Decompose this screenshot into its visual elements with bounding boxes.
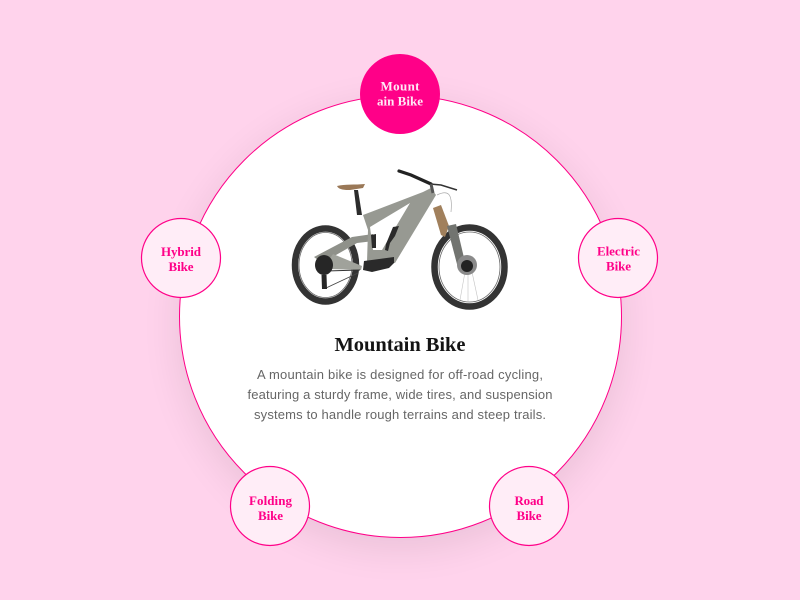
node: Road Bike: Bike bbox=[516, 508, 542, 523]
node: Folding Bike: Folding bbox=[249, 493, 292, 508]
motor bbox=[363, 257, 394, 272]
frame bbox=[363, 188, 436, 263]
node: Road Bike: Road bbox=[514, 493, 544, 508]
node: Electric Bike: Electric bbox=[597, 244, 640, 258]
node: Hybrid Bike: Bike bbox=[168, 259, 194, 274]
bike illustration bbox=[295, 171, 504, 306]
rear wheel bbox=[295, 228, 356, 302]
node: Hybrid Bike bbox=[142, 218, 220, 298]
node: Mountain Bike (active): ain Bike bbox=[377, 94, 423, 108]
rear swingarm and chain bbox=[314, 234, 374, 289]
node: Mountain Bike (active) bbox=[360, 54, 440, 134]
central circle panel bbox=[178, 94, 622, 538]
handlebar bbox=[399, 171, 457, 193]
node: Folding Bike: Bike bbox=[258, 508, 283, 523]
description text bbox=[248, 367, 552, 422]
heading: Mountain Bike bbox=[334, 334, 466, 356]
node: Folding Bike bbox=[230, 466, 310, 546]
seat and seatpost bbox=[337, 184, 365, 215]
node: Road Bike bbox=[490, 466, 568, 546]
shock absorber bbox=[371, 226, 399, 251]
node: Electric Bike bbox=[578, 218, 658, 298]
suspension fork bbox=[433, 193, 477, 275]
front wheel bbox=[434, 228, 504, 306]
node: Mountain Bike (active): Mount bbox=[380, 78, 420, 94]
description text: A mountain bike is designed for off-road cycling, bbox=[257, 367, 543, 382]
description text: featuring a sturdy frame, wide tires, and suspension bbox=[248, 387, 552, 402]
node: Electric Bike: Bike bbox=[606, 258, 631, 274]
description text: systems to handle rough terrains and steep trails. bbox=[254, 407, 546, 422]
node: Hybrid Bike: Hybrid bbox=[161, 244, 202, 259]
